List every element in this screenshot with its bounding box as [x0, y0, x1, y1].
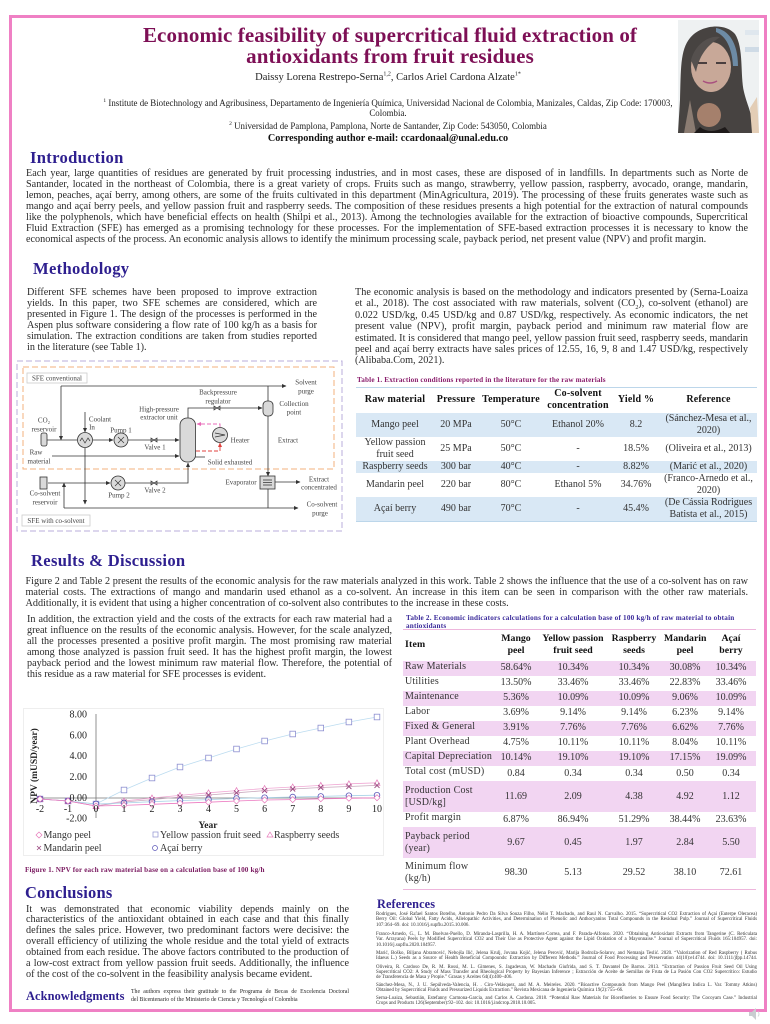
table 2: economic indicators: 0.50	[676, 768, 694, 778]
text block: results left column: great influence on the results of the economic analysis. However, for the scale analyzed,	[27, 625, 392, 636]
text block: methodology right: The economic analysis is based on the methodology and indicators presented by (Serna-Loaiza	[355, 287, 748, 298]
table 2: economic indicators: 17.15%	[670, 752, 700, 763]
table 2: economic indicators: 9.14%	[560, 707, 586, 718]
table 2: economic indicators: 7.76%	[718, 722, 744, 733]
table 2: economic indicators: Item	[405, 639, 425, 650]
icon: speaker	[749, 1008, 760, 1020]
line chart: NPV by year: Raspberry seeds	[274, 830, 339, 841]
heading: Acknowledgments: Acknowledgments	[26, 989, 125, 1003]
table 1: extraction conditions: 50°C	[501, 418, 521, 430]
table 2: economic indicators: 10.11%	[716, 737, 746, 748]
table 1: extraction conditions: 50°C	[501, 442, 521, 454]
line chart: NPV by year: Açaí berry	[160, 843, 202, 854]
table 1 caption: Table 1. Extraction conditions reported in the literature for the raw materials	[357, 376, 606, 384]
table 1: extraction conditions: Ethanol 20%	[552, 418, 604, 430]
text block: methodology right	[355, 287, 748, 366]
line chart: NPV by year: 0	[94, 804, 98, 815]
author photo	[678, 20, 759, 133]
table 1: extraction conditions: Pressure	[437, 394, 475, 405]
table 1: extraction conditions: Mango peel	[371, 418, 419, 430]
line chart: NPV by year: 3	[178, 804, 182, 815]
table 2: economic indicators: 9.14%	[621, 707, 647, 718]
text block: results left column	[27, 614, 392, 680]
table 2: economic indicators: 3.69%	[503, 707, 529, 718]
corresponding author: Corresponding author e-mail: ccardonaal@unal.edu.co	[268, 133, 508, 144]
title: Economic feasibility of supercritical fluid extraction of	[143, 23, 637, 47]
text block: references: Obtained by Supercritical Fluids and Pressurized Liquids Extraction.” Revista Mexicana de Ingeniería Química 19(2):755–66.	[376, 988, 623, 993]
table 2: economic indicators: Maintenance	[405, 690, 459, 702]
text block: results left column: payback period and the lowest minimum raw material flow. Therefore, the potential of	[27, 658, 392, 669]
line chart: NPV by year: 10	[372, 804, 382, 815]
text block: acknowledgments: del Bicentenario of the Ministerio de Ciencia y Tecnología of Colombia	[131, 997, 298, 1003]
table 2: economic indicators: 33.46%	[619, 677, 649, 688]
process diagram: SFE schemes: regulator	[205, 398, 231, 406]
table 2: economic indicators: 0.34	[722, 768, 740, 778]
text block: references: Berry Oil: Global Yield, Fatty Acids, Allelopathic Activities, and Determination of Phenolic and Anthocyanins Total Compounds in the Residual Pulp.” Journal of Supercritical Fluids	[376, 917, 757, 922]
line chart: NPV by year: 9	[346, 804, 351, 815]
text block: methodology right: et al., 2018). The cost associated with raw materials, solvent (CO2), co-solvent (ethanol) are	[355, 298, 748, 311]
table 2: economic indicators: Raw Materials	[405, 660, 466, 672]
heading: Introduction: Introduction	[30, 148, 124, 167]
table 1: extraction conditions: (Oliveira et al., 2013)	[665, 442, 752, 454]
line chart: NPV by year: 5	[234, 804, 239, 815]
text block: references: Var. Arrayana) Peels by Modified Supercritical CO2 and Their Use as Protective Agent against the Lipid Oxidation of a Mayonnaise.” Journal of Supercritical Fluids 165:104957. doi:	[376, 937, 757, 942]
table 2: economic indicators: 33.46%	[558, 677, 588, 688]
line chart: NPV by year: 2.00	[70, 772, 87, 783]
text block: results left column: among those analyzed is passion fruit seed. It has the highest profit margin, the lowest	[27, 647, 392, 658]
text block: conclusions	[26, 904, 350, 980]
text block: conclusions: a low-cost extract from yellow passion fruit seeds. Additionally, the influence	[26, 958, 349, 969]
affiliations: 2 Universidad de Pamplona, Pamplona, Norte de Santander, Zip Code: 543050, Colombia	[229, 121, 547, 131]
table 2: economic indicators: seeds	[623, 645, 645, 656]
process diagram: SFE schemes: Valve 2	[144, 486, 166, 494]
text block: introduction: mango and açaí berry peels, and yellow passion fruit and raspberry seeds. The composition of these residues presents a high potential for the extraction of natural compounds	[26, 201, 748, 212]
process diagram: SFE schemes: In	[89, 424, 95, 432]
line chart: NPV by year: Yellow passion fruit seed	[160, 830, 261, 841]
table 2: economic indicators: 2.09	[564, 790, 582, 802]
text block: conclusions: defines the sales price. However, two predominant factors were decisive: the	[26, 925, 349, 936]
table 1: extraction conditions: Batista et al., 2015)	[669, 508, 748, 520]
process diagram: SFE schemes: Coolant	[89, 416, 111, 424]
text block: methodology left: simulation. The extraction conditions are taken from studies reported	[27, 331, 317, 342]
process diagram: SFE schemes: Heater	[231, 436, 250, 444]
table 1: extraction conditions: (Sánchez-Mesa et al.,	[665, 412, 752, 424]
text block: introduction: like the polyphenols, which have beneficial effects on health (Shilpi et al., 2013). Among the technologies available for the extraction of bioactive compounds, Supercritical	[26, 212, 748, 223]
table 2: economic indicators: 10.34%	[619, 662, 649, 673]
text block: methodology left: Different SFE schemes have been proposed to improve extraction	[27, 287, 317, 298]
text block: conclusions: of the cost of the co-solvent in the feasibility analysis became evident.	[26, 969, 312, 980]
text block: methodology right: present value (NPV), profit margin, payback period and minimum raw material flow are	[355, 321, 748, 332]
table 2: economic indicators: 30.08%	[670, 662, 700, 673]
line chart: NPV by year: -2	[36, 804, 44, 815]
table 1: extraction conditions: 8.2	[630, 418, 642, 430]
table 2: economic indicators: 13.50%	[501, 677, 531, 688]
table 2: economic indicators: 98.30	[505, 867, 527, 878]
line chart: NPV by year: 6.00	[70, 730, 87, 742]
heading: Results & Discussion: Results & Discussion	[31, 551, 185, 570]
table 1: extraction conditions: Co-solvent	[554, 388, 602, 399]
table 2: economic indicators: 72.61	[720, 867, 742, 878]
process diagram: SFE schemes: Collection	[279, 400, 309, 408]
text block: references: Crops and Products 126(September):92–102. doi: 10.1016/j.indcrop.2018.10.005.	[376, 1001, 536, 1006]
process diagram: SFE schemes: point	[287, 408, 301, 416]
text block: conclusions: overall efficiency of utilizing the whole residue and the total yield of extracts	[26, 936, 349, 947]
table 2: economic indicators: 9.67	[507, 836, 525, 848]
table 2: economic indicators: 10.09%	[619, 692, 649, 703]
table 2: economic indicators: 10.14%	[501, 752, 531, 763]
line chart: NPV by year: 8	[318, 804, 323, 815]
line chart: NPV by year: NPV (mUSD/year)	[29, 728, 40, 804]
table 2: economic indicators: 1.12	[722, 790, 740, 802]
process diagram: SFE schemes: High-pressure	[139, 406, 179, 414]
table 1: extraction conditions: 2020)	[697, 424, 720, 436]
table 2: economic indicators: Mango	[501, 633, 531, 644]
process diagram: SFE schemes: Backpressure	[199, 388, 237, 396]
text block: acknowledgments: The authors express their gratitude to the Programa de Becas de Excelencia Doctoral	[131, 989, 349, 995]
line chart: NPV by year: 0.00	[70, 793, 87, 804]
table 1: extraction conditions: Temperature	[482, 394, 540, 405]
text block: references: Serna-Loaiza, Sebastián, Estefanny Carmona-Garcia, and Carlos A. Cardona. 2018. “Potential Raw Materials for Biorefineries to Ensure Food Security: The Cocoyam Case.” Industrial	[376, 996, 757, 1001]
table 2: economic indicators: 86.94%	[558, 814, 588, 824]
affiliations	[103, 98, 673, 131]
text block: introduction: Fluid Extraction (SFE) has emerged as a promising technology for these processes. For the implementation of SFE-based extraction processes it is necessary to know the	[26, 223, 748, 234]
table 2: economic indicators: 6.87%	[503, 814, 529, 824]
text block: introduction: Santander, located in the northeast of Colombia, there is a great variety of crops. Fruits such as mango, strawberry, yellow passion, raspberry, avocado, orange, mandarin,	[26, 179, 748, 190]
table 2: economic indicators: Raspberry	[612, 633, 656, 644]
table 2: economic indicators: 23.63%	[716, 814, 746, 824]
authors: Daissy Lorena Restrepo-Serna1,2, Carlos Ariel Cardona Alzate1*	[255, 72, 521, 83]
process diagram: SFE schemes: Raw	[30, 448, 43, 456]
line chart: NPV by year	[23, 708, 384, 856]
table 2: economic indicators: 4.75%	[503, 737, 529, 748]
text block: references: Marić, Boško, Biljana Abramović, Nebojša Ilić, Jelena Krulj, Jovana Kojić, Jelena Perović, Marija Bodroža-Solarov, and Nemanja Teslić. 2020. “Valorization of Red Raspberry ( Rubus	[376, 951, 757, 956]
table 2: economic indicators: 9.14%	[718, 707, 744, 718]
table 2: economic indicators: berry	[719, 645, 743, 656]
table 1: extraction conditions: Raw material	[365, 394, 425, 405]
process diagram: SFE schemes: Pump 1	[110, 426, 132, 434]
line chart: NPV by year: Year	[198, 821, 218, 831]
text block: results left column: In addition, the extraction yield and the costs of the extracts for each raw material had a	[27, 614, 392, 625]
table 2: economic indicators: Yellow passion	[542, 633, 604, 644]
table 2: economic indicators: 7.76%	[560, 722, 586, 733]
text block: references: 107:364–69. doi: 10.1016/j.supflu.2015.10.006.	[376, 923, 470, 928]
table 2: economic indicators: Mandarin	[664, 633, 706, 644]
table 1: extraction conditions: Reference	[686, 394, 731, 405]
table 2: economic indicators: 4.92	[676, 790, 694, 802]
text block: results intro: Additionally, it is evident that using a higher concentration of co-solvent also contributes to the increase in these costs.	[26, 598, 509, 609]
table 1: extraction conditions: Yellow passion	[365, 436, 425, 448]
process diagram: SFE schemes: Solid exhausted	[208, 458, 253, 466]
figure 1 caption: Figure 1. NPV for each raw material base on a calculation base of 100 kg/h	[25, 866, 265, 874]
text block: references: Oliveira, R. Cardoso De, R. M. Rossi, M. L. Gimenes, S. Jagadevan, W. Machado Giufrida, and S. T. Davantel De Barros. 2013. “Extraction of Passion Fruit Seed Oil Using	[376, 964, 757, 970]
table 1: extraction conditions: 34.76%	[621, 478, 651, 490]
table 2: economic indicators: 5.13	[564, 867, 582, 878]
table 2: economic indicators: peel	[508, 645, 524, 656]
text block: conclusions: obtained from each residue. The above factors contributed to the production of	[26, 947, 349, 958]
table 2: economic indicators: (kg/h)	[405, 873, 431, 884]
text block: introduction: lemon, peaches, açaí berry, among others, are some of the fruits cultivated in this department (MinAgricultura, 2019). The processing of these fruits generates waste such as	[26, 190, 748, 201]
text block: introduction	[26, 168, 748, 245]
process diagram: SFE schemes: Co-solvent	[30, 490, 60, 498]
process diagram: SFE schemes: Extract	[278, 436, 298, 444]
table 2: economic indicators: [USD/kg]	[405, 796, 446, 808]
table 1: extraction conditions: 45.4%	[623, 502, 649, 514]
line chart: NPV by year: -1	[64, 804, 72, 815]
table 2: economic indicators: Labor	[405, 706, 430, 716]
table 2: economic indicators: 3.91%	[503, 722, 529, 733]
heading: Methodology: Methodology	[33, 259, 129, 278]
process diagram: SFE schemes: Solvent	[295, 378, 317, 386]
text block: acknowledgments	[131, 988, 349, 1003]
table 1: extraction conditions: 220 bar	[441, 478, 471, 490]
table 1: extraction conditions: 2020)	[697, 484, 720, 496]
table 2: economic indicators: 10.09%	[558, 692, 588, 703]
table 2: economic indicators: 0.34	[625, 768, 643, 778]
text block: references: Supercritical CO2: A Study of Mass Transfer and Rheological Property by Bayesian Inference ; Estracción de Aceite de Semillas de Fruta de La Pasión Con CO2 Supercrítico: Estudio	[376, 970, 757, 975]
line chart: NPV by year: 4	[206, 804, 211, 815]
table 2: economic indicators: fruit seed	[553, 645, 593, 656]
affiliations: Colombia.	[369, 108, 407, 118]
heading: References: References	[377, 897, 435, 911]
text block: results intro: material costs. The extractions of mango and mandarin used ethanol as a co-solvent. An increase in this item can be seen in comparison with the other raw materials.	[26, 587, 748, 598]
table 1: extraction conditions: 25 MPa	[440, 442, 472, 454]
table 2: economic indicators: 22.83%	[670, 677, 700, 688]
table 2: economic indicators: 19.09%	[716, 752, 746, 763]
text block: references: de Transferencia de Masa y Propie.” Grasas y Aceites 64(4):400–406.	[376, 975, 512, 980]
table 2: economic indicators: 58.64%	[501, 662, 531, 673]
text block: introduction: economical aspects of the process. An economic analysis allows to identify the minimum processing scale, payback period, net present value (NPV) and profit margin.	[26, 234, 706, 245]
process diagram: SFE schemes: purge	[298, 388, 314, 396]
table 2: economic indicators: (year)	[405, 842, 430, 854]
table 2: economic indicators: Utilities	[405, 676, 439, 686]
table 1: extraction conditions: 80°C	[501, 478, 521, 490]
table 1: extraction conditions: -	[576, 442, 580, 454]
table 1: extraction conditions	[356, 387, 757, 522]
text block: conclusions: characteristics of the antioxidant obtained in each case and that this finally	[26, 914, 349, 925]
table 1: extraction conditions: (De Cássia Rodrigues	[665, 496, 752, 508]
process diagram: SFE schemes: reservoir	[32, 426, 57, 434]
text block: methodology left: in the literature (see Table 1).	[27, 342, 147, 353]
process diagram: SFE schemes	[16, 360, 342, 532]
process diagram: SFE schemes: CO₂	[38, 416, 51, 424]
table 1: extraction conditions: 490 bar	[441, 502, 471, 514]
table 1: extraction conditions: (Franco-Arnedo et al.,	[664, 472, 753, 484]
table 2: economic indicators: 6.23%	[672, 707, 698, 718]
text block: results left column: this residue as a raw material for SFE processes is evident.	[27, 669, 266, 680]
table 1: extraction conditions: Açaí berry	[374, 502, 416, 514]
text block: results intro: Figure 2 and Table 2 present the results of the economic analysis for the raw materials analyzed in this work. Table 2 shows the influence that the use of a co-solvent has on raw	[26, 576, 748, 587]
line chart: NPV by year: Mandarin peel	[44, 843, 102, 854]
line chart: NPV by year: 2	[150, 804, 154, 815]
table 2: economic indicators: 6.62%	[672, 722, 698, 733]
line chart: NPV by year: -2.00	[66, 814, 87, 824]
table 2: economic indicators: 0.84	[507, 768, 525, 778]
table 2: economic indicators: 38.10	[674, 867, 696, 878]
process diagram: SFE schemes: Valve 1	[144, 444, 166, 452]
title: antioxidants from fruit residues	[246, 44, 534, 68]
text block: methodology left	[27, 287, 317, 353]
table 2: economic indicators: 1.97	[625, 836, 643, 848]
table 2: economic indicators: 19.10%	[558, 752, 588, 763]
table 2: economic indicators: Production Cost	[405, 784, 473, 796]
process diagram: SFE schemes: Evaporator	[225, 478, 257, 486]
table 2: economic indicators: 11.69	[505, 790, 527, 802]
table 1: extraction conditions: 300 bar	[441, 460, 471, 472]
table 2: economic indicators: Minimum flow	[405, 861, 468, 872]
text block: methodology right: estimated. It is considered that mango peel, yellow passion fruit seed, raspberry seeds, mandarin	[355, 333, 748, 344]
table 1: extraction conditions: concentration	[547, 400, 609, 411]
table 1: extraction conditions: -	[576, 460, 580, 472]
table 2: economic indicators: Total cost (mUSD)	[405, 766, 484, 777]
table 1: extraction conditions: (Marić et al., 2020)	[670, 460, 747, 472]
table 2: economic indicators: 7.76%	[621, 722, 647, 733]
text block: results left column: all the processes presented a positive profit margin. The most promising raw material	[27, 636, 392, 647]
table 2: economic indicators: Açaí	[721, 633, 741, 644]
process diagram: SFE schemes: purge	[312, 510, 328, 518]
text block: references: Franco-Arnedo, G., L. M. Buelvas-Puello, D. Miranda-Lasprilla, H. A. Martínez-Correa, and F. Parada-Alfonso. 2020. “Obtaining Antioxidant Extracts from Tangerine (C. Reticulata	[376, 932, 757, 937]
table 1: extraction conditions: -	[576, 502, 580, 514]
table 2: economic indicators: 29.52	[623, 867, 645, 878]
process diagram: SFE schemes: material	[28, 458, 51, 466]
table 2: economic indicators: 38.44%	[670, 814, 700, 824]
table 1: extraction conditions: Ethanol 5%	[555, 478, 601, 490]
table 2: economic indicators: 0.34	[564, 768, 582, 778]
text block: references: Sánchez-Mesa, N., J. U. Sepúlveda-Valencia, H. . Ciro-Velásquez, and M. A. Meireles. 2020. “Bioactive Compounds from Mango Peel (Mangifera Indica L. Var. Tommy Atkins)	[376, 983, 757, 988]
table 2: economic indicators: Capital Depreciation	[405, 751, 492, 762]
text block: methodology left: yields. In this paper, two SFE schemes are considered, which are	[27, 298, 317, 309]
table 2: economic indicators: 10.11%	[558, 737, 588, 748]
process diagram: SFE schemes: reservoir	[33, 498, 58, 506]
table 2: economic indicators: 51.29%	[619, 814, 649, 824]
text block: references: Idaeus L.) Seeds as a Source of Health Beneficial Compounds: Extraction by Different Methods.” Journal of Food Processing and Preservation 44(10):e14744. doi: 10.1111/jfpp.14744.	[376, 956, 757, 961]
heading: Conclusions: Conclusions	[25, 883, 112, 902]
process diagram: SFE schemes: SFE with co-solvent	[27, 517, 85, 525]
text block: methodology left: presented in Figure 1. The design of the processes is performed in the	[27, 309, 317, 320]
text block: conclusions: It was demonstrated that economic viability depends mainly on the	[26, 904, 349, 914]
text block: methodology left: Aspen plus software considering a flow rate of 100 kg/h as a basis for	[27, 320, 317, 331]
table 2: economic indicators: Plant Overhead	[405, 736, 470, 746]
table 1: extraction conditions: 40°C	[501, 460, 521, 472]
process diagram: SFE schemes: Co-solvent	[307, 500, 337, 508]
text block: results intro	[26, 576, 748, 609]
table 2: economic indicators: 10.34%	[558, 662, 588, 673]
table 1: extraction conditions: Raspberry seeds	[362, 460, 428, 472]
table 1: extraction conditions: 18.5%	[623, 442, 649, 454]
process diagram: SFE schemes: SFE conventional	[32, 374, 82, 382]
table 2: economic indicators: 0.45	[564, 836, 582, 848]
table 1: extraction conditions: Mandarin peel	[366, 478, 424, 490]
affiliations: 1 Institute de Biotechnology and Agribusiness, Departamento de Ingeniería Química, Universidad Nacional de Colombia, Manizales, Caldas, Zip Code: 170003,	[103, 98, 673, 108]
table 2: economic indicators: Fixed & General	[405, 720, 475, 732]
process diagram: SFE schemes: Pump 2	[108, 492, 130, 500]
table 2: economic indicators: peel	[677, 645, 693, 656]
table 1: extraction conditions: 20 MPa	[440, 418, 472, 430]
line chart: NPV by year: 1	[122, 804, 126, 815]
text block: references: Rodrigues, José Rafael Santos Botelho, Antonio Pedro Da Silva Souza Filho, Nélio T. Machado, and Raul N. Carvalho. 2015. “Supercritical CO2 Extraction of Açaí (Euterpe Oleracea)	[376, 912, 757, 917]
line chart: NPV by year: 8.00	[70, 710, 87, 720]
table 2: economic indicators: 4.38	[625, 790, 643, 802]
text block: methodology right: 0.022 USD/kg, 0.45 USD/kg and 0.87 USD/kg, respectively. As economic indicators, the net	[355, 310, 748, 321]
title	[143, 23, 638, 68]
table 2: economic indicators: 10.11%	[619, 737, 649, 748]
table 2: economic indicators: 10.09%	[716, 692, 746, 703]
table 2: economic indicators	[403, 629, 756, 890]
table 2: economic indicators: 9.06%	[672, 692, 698, 703]
table 2 caption: Table 2. Economic indicators calculations for a calculation base of 100 kg/h of raw material to obtain antioxidants	[406, 614, 734, 630]
table 1: extraction conditions: fruit seed	[376, 448, 414, 460]
table 1: extraction conditions: 70°C	[501, 502, 521, 514]
line chart: NPV by year: Mango peel	[44, 830, 91, 841]
table 2: economic indicators: 2.84	[676, 836, 694, 848]
text block: methodology right: (Alibaba.Com, 2021).	[355, 355, 444, 366]
text block: methodology right: peel and açaí berry extracts have sales prices of 12.55, 16, 9, 8 and 1.47 USD/kg, respectively	[355, 344, 748, 355]
process diagram: SFE schemes: concentrated	[301, 484, 337, 492]
line chart: NPV by year: 4.00	[70, 751, 87, 762]
table 2: economic indicators: 33.46%	[716, 677, 746, 688]
table 2: economic indicators: 5.50	[722, 836, 740, 848]
process diagram: SFE schemes: Extract	[309, 476, 329, 484]
table 2: economic indicators: 19.10%	[619, 752, 649, 763]
line chart: NPV by year: 7	[290, 804, 295, 815]
text block: references	[376, 911, 757, 1006]
table 2: economic indicators: 8.04%	[672, 737, 698, 748]
table 1: extraction conditions: Yield %	[618, 394, 654, 405]
line chart: NPV by year: 6	[262, 804, 267, 815]
table 1: extraction conditions: 8.82%	[623, 460, 649, 472]
text block: introduction: Each year, large quantities of residues are generated by fruit processing industries, and in most cases, these are disposed of in landfills. In departments such as Norte de	[26, 168, 748, 179]
table 2: economic indicators: 10.34%	[716, 662, 746, 673]
table 2: economic indicators: 5.36%	[503, 692, 529, 703]
table 2: economic indicators: Profit margin	[405, 812, 461, 823]
text block: references: 10.1016/j.supflu.2020.104957.	[376, 943, 436, 948]
process diagram: SFE schemes: extractor unit	[140, 414, 178, 422]
table 2: economic indicators: Payback period	[405, 830, 470, 842]
